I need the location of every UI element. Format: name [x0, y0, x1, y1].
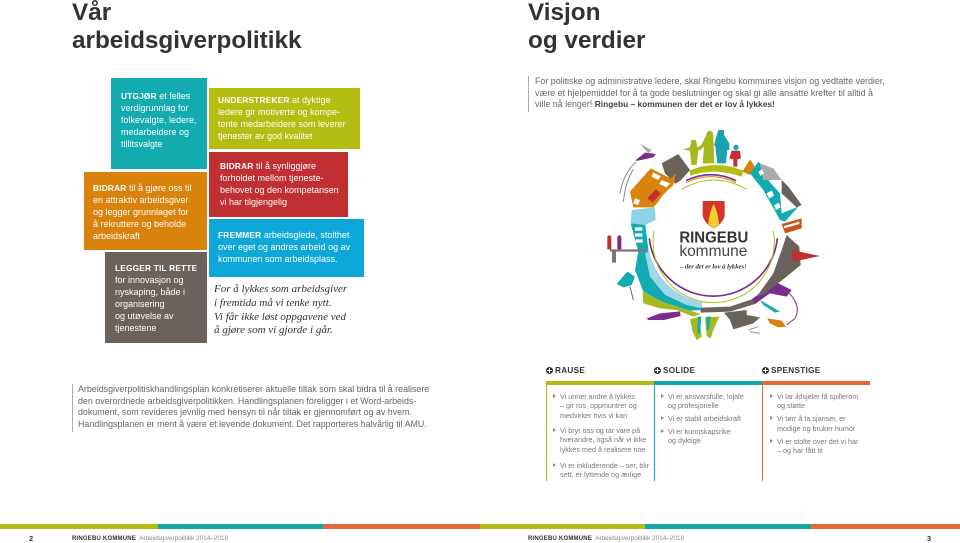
white centre — [648, 172, 779, 303]
panel: brown legger til rette: tjenestene — [115, 323, 157, 333]
panel: brown legger til rette: og utøvelse av — [115, 311, 174, 321]
panel: teal utgjør — [111, 78, 207, 169]
panel: teal utgjør: UTGJØR et felles — [121, 91, 190, 101]
list solide: og profesjonelle — [668, 401, 719, 410]
vision text: være et hjelpemiddel for å ta gode beslutninger og skal gi alle ansatte krefter til alltid å — [535, 88, 873, 98]
list rause: sett, er lyttende og ærlige — [560, 470, 641, 479]
column heading: spenstige: SPENSTIGE — [771, 366, 821, 375]
panel: orange bidrar: arbeidskraft — [93, 231, 140, 241]
column rule solide — [654, 385, 655, 481]
panel: orange bidrar: og legger grunnlaget for — [93, 207, 189, 217]
panel: teal utgjør: folkevalgte, ledere, — [121, 115, 197, 125]
list solide: Vi er ansvarsfulle, lojale — [668, 392, 744, 401]
ring of landscape — [607, 144, 820, 340]
list rause: Vi unner andre å lykkes — [560, 392, 635, 401]
panel: orange bidrar: en attraktiv arbeidsgiver — [93, 195, 189, 205]
panel: red bidrar: behovet og den kompetansen — [220, 185, 339, 195]
panel: olive understreker — [209, 88, 360, 149]
plan text: Handlingsplanen er ment å være et levende dokument. Det rapporteres halvårlig til AMU. — [78, 419, 427, 429]
panel: brown legger til rette — [105, 252, 207, 343]
list solide: Vi er stabil arbeidskraft — [668, 414, 741, 423]
column bar solide — [654, 381, 762, 385]
panel: brown legger til rette: LEGGER TIL RETTE — [115, 263, 197, 273]
quote: Vi får ikke løst oppgavene ved — [214, 311, 346, 323]
panel: teal utgjør: tillitsvalgte — [121, 139, 163, 149]
list rause: Vi bryr oss og tar vare på — [560, 426, 640, 435]
panel: brown legger til rette: nyskaping, både i — [115, 287, 185, 297]
panel: orange bidrar: BIDRAR til å gjøre oss til — [93, 183, 192, 193]
column heading: solide: SOLIDE — [663, 366, 695, 375]
family figures — [683, 130, 741, 167]
page number right: 3 — [927, 534, 931, 543]
panel: blue fremmer: kommunen som arbeidsplass. — [218, 254, 338, 264]
plan text: den overordnede arbeidsgiverpolitikken. Handlingsplanen foreligger i et Word-arbeids- — [78, 396, 416, 406]
panel: olive understreker: UNDERSTREKER at dyktige — [218, 95, 331, 105]
title: Vår arbeidsgiverpolitikk: arbeidsgiverpolitikk — [72, 27, 302, 54]
list rause: hverandre, også når vi ikke — [560, 435, 646, 444]
panel: teal utgjør: medarbeidere og — [121, 127, 189, 137]
list rause: medvirker hvis vi kan — [560, 411, 627, 420]
list rause — [553, 392, 649, 479]
panel: olive understreker: ledere gir motiverte og kompe- — [218, 107, 340, 117]
list spenstige: Vi er stolte over det vi har — [777, 437, 858, 446]
vision text — [528, 76, 885, 112]
inner arcs — [649, 175, 777, 303]
footer bar right — [480, 524, 960, 528]
panel: orange bidrar — [84, 172, 207, 250]
footer bar left — [0, 524, 480, 528]
page number left: 2 — [29, 534, 33, 543]
quote — [214, 283, 348, 336]
panel: red bidrar — [209, 152, 348, 217]
vision text: ville nå lenger! Ringebu – kommunen der det er lov å lykkes! — [535, 99, 775, 109]
title: Vår arbeidsgiverpolitikk — [72, 0, 302, 54]
list solide — [661, 392, 744, 445]
panel: red bidrar: vi har tilgjengelig — [220, 197, 287, 207]
column rule rause — [546, 385, 547, 481]
building: blue bus — [631, 207, 656, 225]
panel: orange bidrar: å rekruttere og beholde — [93, 219, 186, 229]
panel: red bidrar: BIDRAR til å synliggjøre — [220, 161, 316, 171]
plan text — [72, 384, 429, 432]
list rause: Vi er inkluderende – ser, blir — [560, 460, 649, 470]
logo text — [679, 201, 748, 270]
column bar spenstige — [762, 381, 870, 385]
list rause: – gir ros, oppmuntrer og — [560, 401, 637, 410]
panel: teal utgjør: verdigrunnlag for — [121, 103, 189, 113]
column rule spenstige — [762, 385, 763, 481]
logo text: kommune — [679, 243, 747, 260]
quote: å gjøre som vi gjorde i går. — [214, 324, 333, 336]
list spenstige: Vi tørr å ta sjanser, er — [777, 414, 846, 423]
quote: i fremtida må vi tenke nytt. — [214, 297, 332, 309]
panel: brown legger til rette: organisering — [115, 299, 165, 309]
column bar rause — [546, 381, 654, 385]
panel: blue fremmer: over eget og andres arbeid og av — [218, 242, 350, 252]
list spenstige: Vi lar ildsjeler få spillerom — [777, 392, 858, 401]
panel: olive understreker: tjenester av god kvalitet — [218, 131, 313, 141]
logo text: – der det er lov å lykkes! — [679, 263, 747, 270]
quote: For å lykkes som arbeidsgiver — [214, 283, 347, 295]
list rause: lykkes med å realisere noe — [560, 445, 646, 454]
column heading: rause: RAUSE — [555, 366, 585, 375]
plan text: Arbeidsgiverpolitiskhandlingsplan konkretiserer aktuelle tiltak som skal bidra til å realisere — [78, 384, 429, 394]
plan text: dokument, som revideres jevnlig med hensyn til når tiltak er gjennomført og av hvem. — [78, 407, 412, 417]
title: Visjon og verdier: og verdier — [528, 27, 645, 54]
list solide: og dyktige — [668, 436, 701, 445]
panel: brown legger til rette: for innovasjon og — [115, 275, 184, 285]
panel: red bidrar: forholdet mellom tjeneste- — [220, 173, 324, 183]
panel: olive understreker: tente medarbeidere som leverer — [218, 119, 346, 129]
logo text: RINGEBU — [679, 229, 748, 246]
panel: blue fremmer: FREMMER arbeidsglede, stolthet — [218, 230, 349, 240]
logo illustration — [607, 130, 820, 340]
list spenstige: og støtte — [777, 401, 805, 410]
list spenstige: – og har fått til — [777, 446, 823, 455]
list solide: Vi er kunnskapsrike — [668, 427, 731, 436]
footer text left: RINGEBU KOMMUNE Arbeidsgiverpolitikk 2014–2018 — [72, 535, 228, 542]
list spenstige: modige og bruker humor — [777, 424, 855, 433]
vision text: For politiske og administrative ledere, skal Ringebu kommunes visjon og vedtatte verdier, — [535, 76, 885, 86]
footer text right: RINGEBU KOMMUNE Arbeidsgiverpolitikk 2014–2018 — [528, 535, 684, 542]
title: Visjon og verdier — [528, 0, 646, 54]
panel: blue fremmer — [209, 219, 364, 277]
list spenstige — [770, 392, 858, 455]
